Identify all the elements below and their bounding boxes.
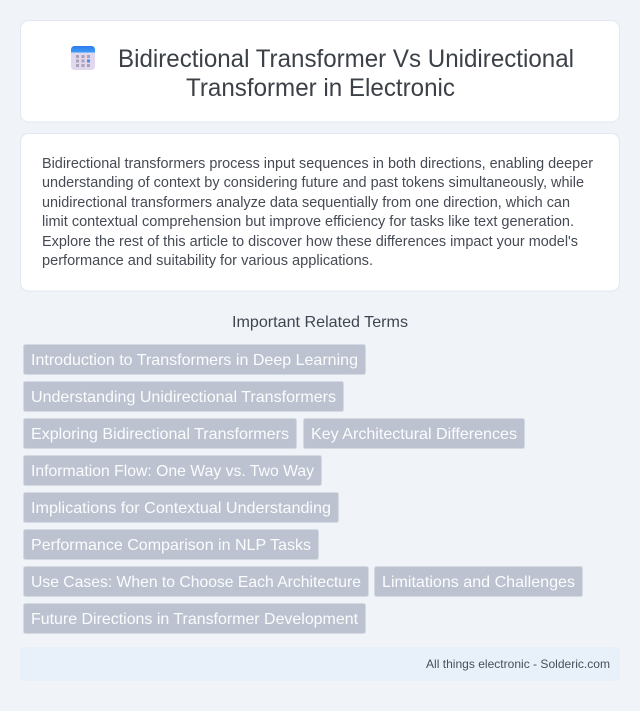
- tag: architectural differences: Key Architectural Differences: [311, 426, 517, 443]
- tag: introduction: [24, 344, 366, 374]
- tag: performance comparison: [24, 530, 318, 560]
- panel: introduction: [20, 134, 620, 291]
- title: Bidirectional Transformer Vs Unidirectional: [118, 45, 574, 73]
- tag: contextual understanding: Implications for Contextual Understanding: [31, 500, 331, 517]
- text block: introduction: limit contextual comprehension but improve efficiency for tasks like text generation.: [42, 214, 574, 230]
- footer credit: All things electronic - Solderic.com: [426, 657, 610, 671]
- title: Transformer in Electronic: [186, 74, 455, 102]
- heading: important related terms: Important Related Terms: [232, 314, 408, 331]
- text block: introduction: Bidirectional transformers process input sequences in both directions, enabling deeper: [42, 156, 593, 172]
- text block: introduction: Explore the rest of this article to discover how these differences impact your model's: [42, 234, 578, 250]
- tag: future directions: Future Directions in Transformer Development: [31, 611, 359, 628]
- tag: future directions: [24, 604, 366, 634]
- text block: introduction: performance and suitability for various applications.: [42, 253, 373, 269]
- tag list: [24, 344, 582, 634]
- tag: introduction: Introduction to Transformers in Deep Learning: [31, 352, 358, 369]
- tag: unidirectional: Understanding Unidirectional Transformers: [31, 389, 336, 406]
- tag: architectural differences: [304, 418, 524, 448]
- tag: unidirectional: [24, 382, 344, 412]
- icon: calendar: [71, 46, 95, 70]
- tag: performance comparison: Performance Comparison in NLP Tasks: [31, 537, 311, 554]
- panel: title card: [20, 20, 620, 122]
- tag: information flow: Information Flow: One Way vs. Two Way: [31, 463, 314, 480]
- tag: information flow: [24, 456, 322, 486]
- footer: [20, 647, 620, 681]
- text block: introduction: understanding of context by considering future and past tokens simultaneously, while: [42, 175, 584, 191]
- tag: limitations: Limitations and Challenges: [382, 574, 575, 591]
- tag: bidirectional: [24, 418, 296, 448]
- text block: introduction: unidirectional transformers analyze data sequentially from one direction, which can: [42, 195, 570, 211]
- tag: use cases: Use Cases: When to Choose Each Architecture: [31, 574, 361, 591]
- tag: limitations: [374, 566, 582, 596]
- tag: contextual understanding: [24, 492, 338, 522]
- tag: use cases: [24, 566, 368, 596]
- tag: bidirectional: Exploring Bidirectional Transformers: [31, 426, 289, 443]
